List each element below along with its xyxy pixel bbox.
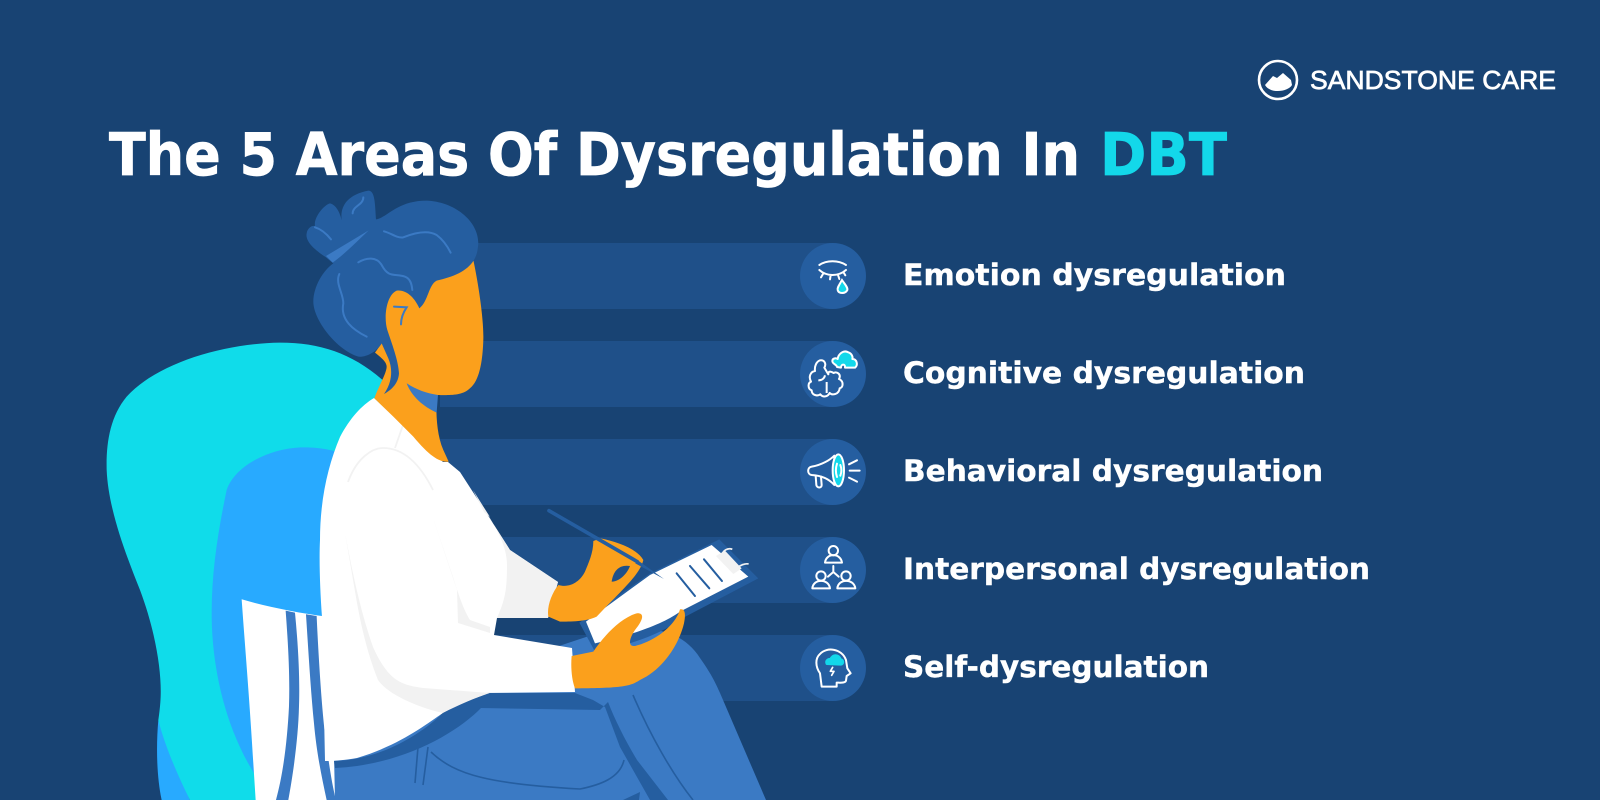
label: emotion dysregulation: Emotion dysregulation: [903, 258, 1286, 292]
row: self-dysregulation: [440, 635, 1209, 701]
icon: megaphone: [808, 454, 860, 487]
icon: crying eye: [819, 261, 847, 293]
hands and pen: [548, 511, 685, 688]
clipboard: [579, 539, 758, 652]
icon: brain with puzzle piece: [809, 351, 857, 396]
illustration: woman sitting in a chair writing on a clipboard: [107, 191, 766, 800]
armchair: [107, 343, 390, 800]
row: behavioral dysregulation: [440, 439, 1323, 505]
logo: Sandstone Care: [1259, 61, 1556, 99]
torso and arms in white shirt: [320, 398, 575, 768]
icon: connected people: [812, 546, 855, 588]
row: cognitive dysregulation: [440, 341, 1305, 407]
label: cognitive dysregulation: Cognitive dysregulation: [903, 356, 1305, 390]
logo wordmark: SANDSTONE CARE: [1310, 65, 1556, 95]
label: interpersonal dysregulation: Interpersonal dysregulation: [903, 552, 1370, 586]
title: main words: The 5 Areas Of Dysregulation In: [109, 120, 1080, 189]
title: [109, 120, 1227, 189]
label: behavioral dysregulation: Behavioral dysregulation: [903, 454, 1323, 488]
icon: mountain logo: [1259, 61, 1297, 99]
label: self-dysregulation: Self-dysregulation: [903, 650, 1209, 684]
panel: list of five dysregulation areas: [440, 243, 1370, 701]
title: DBT highlight: DBT: [1100, 120, 1227, 189]
icon: head with storm cloud: [816, 650, 851, 687]
jeans: [334, 630, 766, 800]
head, neck and hair: [306, 191, 483, 462]
row: interpersonal dysregulation: [440, 537, 1370, 603]
row: emotion dysregulation: [440, 243, 1286, 309]
